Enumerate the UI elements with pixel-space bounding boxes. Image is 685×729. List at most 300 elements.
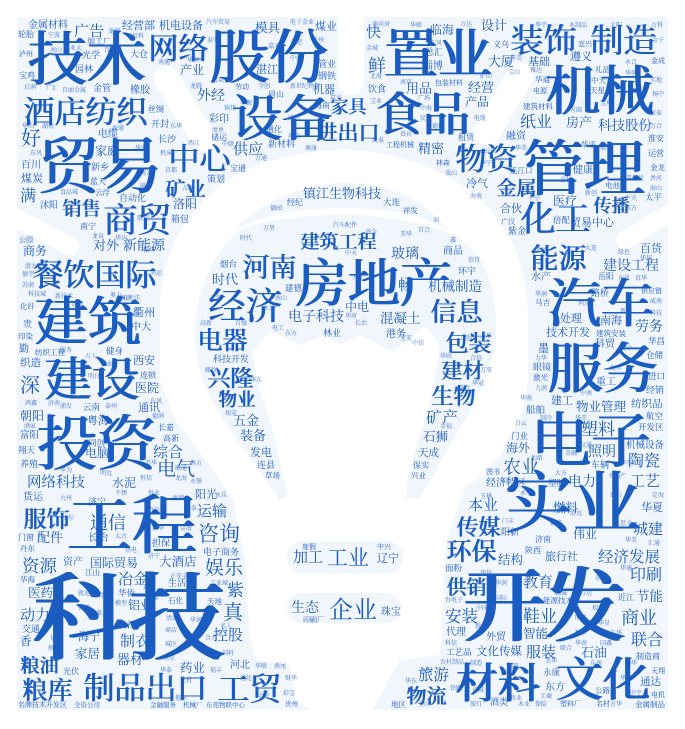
medium keywords: middle left: 西安: [133, 352, 155, 368]
medium keywords: upper left: [18, 16, 337, 245]
medium keywords: lower left: 海宁: [78, 628, 100, 644]
medium keywords: lower right: 塑料厂: [560, 699, 581, 709]
small filler words: 燕尾: [274, 661, 286, 670]
medium keywords: lower right: 华夏: [641, 499, 663, 515]
small filler words: 南京: [400, 77, 412, 86]
secondary keywords: 经济: [208, 276, 282, 330]
largest keywords: 开发: [464, 543, 626, 659]
small filler words: 明珠: [575, 613, 587, 622]
center capsule labels: 加工: [293, 546, 323, 567]
small filler words: 西江: [188, 138, 200, 147]
medium keywords: middle left: 时代: [212, 269, 238, 288]
small filler words: 恒业: [148, 488, 160, 497]
medium keywords: lower left: 机械厂: [183, 700, 203, 709]
medium keywords: middle right: 纺织品: [631, 396, 662, 411]
secondary keywords: 服饰: [23, 501, 69, 534]
medium keywords: upper right: 大厦: [488, 51, 514, 70]
small filler words: 电工: [272, 323, 284, 332]
small filler words: 东风: [30, 148, 42, 157]
small filler words: 泰安: [207, 35, 219, 44]
small filler words: 湖南: [42, 121, 54, 130]
small filler words: 长城: [472, 685, 484, 694]
medium keywords: middle left: 健身: [106, 345, 124, 357]
small filler words: 亚太: [70, 43, 82, 52]
medium keywords: upper right: 房产: [566, 112, 592, 131]
small filler words: 服务: [60, 345, 72, 354]
medium keywords: lower left: 货运: [23, 488, 44, 503]
small filler words: 美华: [145, 458, 157, 467]
small filler words: 城区: [165, 639, 177, 648]
medium keywords: middle left: 建德: [285, 282, 303, 294]
medium keywords: middle right: 港务: [386, 325, 406, 340]
secondary keywords: 家具: [330, 93, 367, 119]
small filler words: 高新: [200, 318, 212, 327]
secondary keywords: 兴隆: [207, 360, 253, 393]
medium keywords: middle right: 环宇: [458, 264, 476, 277]
small filler words: 福丰: [210, 665, 222, 674]
small filler words: 百强: [235, 318, 248, 327]
small filler words: 龙湖: [530, 453, 542, 462]
small filler words: 玉山: [418, 699, 430, 708]
medium keywords: upper left: 百川: [21, 156, 41, 171]
small filler words: 国华: [146, 594, 158, 603]
small filler words: 门丰: [502, 516, 514, 525]
medium keywords: upper left: 新材料: [268, 137, 295, 150]
medium keywords: lower left: 咨询: [198, 518, 240, 548]
small filler words: 沃尔: [288, 113, 300, 122]
small filler words: 通达: [240, 673, 252, 682]
small filler words: 中国: [476, 603, 488, 612]
medium keywords: lower left: 药业: [180, 658, 206, 676]
small filler words: 玉林: [480, 491, 492, 500]
small filler words: 航空: [137, 213, 149, 222]
small filler words: 华为: [60, 465, 72, 474]
small filler words: 新泰: [650, 108, 662, 117]
medium keywords: upper right: 电池: [605, 180, 620, 191]
small filler words: 鸿鑫: [25, 398, 37, 407]
medium keywords: upper right: 大连: [383, 196, 401, 208]
small filler words: 华开: [575, 413, 587, 422]
small filler words: 浦发: [60, 401, 72, 410]
small filler words: 长治: [355, 318, 368, 327]
medium keywords: lower left: 紫: [227, 576, 244, 601]
medium keywords: lower left: 国际贸易: [90, 554, 138, 571]
small filler words: 新技术: [55, 291, 73, 300]
small filler words: 南山: [50, 45, 62, 54]
large keywords: 实业: [505, 450, 641, 547]
medium keywords: middle right: 建设工程: [603, 255, 659, 275]
small filler words: 美华: [545, 656, 557, 665]
medium keywords: upper right: [287, 15, 665, 237]
medium keywords: lower right: 伟业: [573, 525, 597, 542]
medium keywords: upper right: 义乌: [493, 39, 509, 50]
medium keywords: upper left: 供应: [233, 138, 263, 159]
small filler words: 华府: [345, 311, 357, 320]
small filler words: 制冷: [540, 413, 552, 422]
medium keywords: upper right: 电源: [533, 86, 548, 96]
medium keywords: lower left: 大酒店: [159, 552, 197, 570]
small filler words: 百川: [148, 505, 160, 514]
medium keywords: middle right: 门业: [511, 430, 529, 442]
small filler words: 太古: [115, 531, 127, 540]
small filler words: 科信: [445, 638, 457, 647]
medium keywords: lower left: 医药: [28, 583, 53, 601]
medium keywords: lower left: 阳光: [195, 486, 217, 502]
small filler words: 海山: [650, 183, 662, 192]
medium keywords: upper left: 宝通: [230, 163, 246, 174]
medium keywords: upper left: 经营部: [122, 17, 155, 33]
medium keywords: middle right: 塑胶: [548, 477, 566, 489]
small filler words: 锦邦: [224, 103, 236, 112]
secondary keywords: 传媒: [456, 511, 500, 542]
medium keywords: lower right: 近江: [618, 592, 634, 603]
small filler words: 广汇: [46, 83, 58, 92]
small filler words: 汽车配件: [333, 220, 357, 229]
medium keywords: middle right: 华昌: [648, 335, 665, 347]
small filler words: 万达: [460, 19, 472, 28]
small filler words: 下关: [625, 193, 637, 202]
small filler words: 东方: [625, 203, 637, 212]
small filler words: 品牌: [183, 183, 195, 192]
small filler words: 九润: [535, 383, 547, 392]
small filler words: 华润: [625, 68, 637, 77]
medium keywords: lower left: 运输: [197, 500, 227, 521]
small filler words: 云山: [480, 146, 492, 155]
large keywords: 文化: [556, 643, 650, 710]
medium keywords: lower right: 陕西: [525, 545, 541, 556]
small filler words: 龙湖: [108, 26, 120, 35]
large keywords: 管理: [523, 121, 645, 208]
small filler words: 中宇: [630, 688, 642, 697]
medium keywords: middle left: 医院: [135, 379, 159, 396]
medium keywords: middle left: 化纤: [20, 301, 35, 312]
medium keywords: upper right: 融资: [506, 127, 527, 142]
small filler words: 华泰: [620, 673, 632, 682]
large keywords: 置业: [384, 12, 492, 89]
small filler words: 制造: [470, 658, 482, 667]
small filler words: 北海: [370, 71, 382, 80]
medium keywords: upper left: 云浮: [95, 187, 110, 198]
center capsule labels: 珠宝: [381, 603, 401, 618]
small filler words: 绿色: [618, 247, 630, 256]
medium keywords: middle left: 翔天: [18, 444, 36, 456]
large keywords: 材料: [456, 651, 540, 711]
small filler words: 白云: [515, 418, 527, 427]
secondary keywords: 化工: [520, 192, 590, 242]
medium keywords: lower left: 器材: [117, 649, 143, 668]
small filler words: 苏润: [22, 280, 34, 289]
medium keywords: middle left: 衢州: [133, 304, 155, 320]
small filler words: 华泰: [185, 503, 197, 512]
small filler words: 华信: [480, 568, 492, 577]
medium keywords: upper left: 自动化: [119, 191, 146, 204]
small filler words: 扬中: [652, 89, 664, 98]
small filler words: 华泰: [160, 665, 172, 674]
medium keywords: middle right: 照明: [588, 441, 616, 461]
small filler words: 时代: [240, 233, 252, 242]
small filler words: 财华: [285, 673, 297, 682]
medium keywords: lower right: 公路: [595, 685, 610, 696]
small filler words: 大方: [555, 468, 567, 477]
small filler words: 合力: [205, 633, 217, 642]
small filler words: 大连: [585, 243, 597, 252]
medium keywords: upper left: 箱包: [171, 212, 189, 225]
small filler words: 金子: [652, 35, 664, 44]
small filler words: 沃尔: [62, 513, 74, 522]
small filler words: 华宇: [535, 20, 547, 29]
small filler words: 万里: [263, 223, 275, 232]
small filler words: 方华: [610, 699, 622, 708]
secondary keywords: 销售: [62, 194, 100, 221]
medium keywords: lower right: 商业: [621, 604, 657, 630]
small filler words: 新华: [152, 523, 164, 532]
medium keywords: lower right: 印刷: [630, 562, 662, 585]
small filler words: 华南: [575, 638, 587, 647]
medium keywords: lower right: 服装: [526, 641, 556, 662]
small filler words: 金福: [440, 421, 452, 430]
medium keywords: lower right: 电机: [651, 690, 665, 700]
small filler words: 瑞安: [592, 603, 604, 612]
small filler words: 数字: [575, 628, 587, 637]
medium keywords: upper left: 长沙: [158, 132, 177, 145]
medium keywords: middle left: 电脑: [85, 444, 109, 461]
medium keywords: lower left: 担保: [152, 536, 170, 549]
medium keywords: upper right: 工程机械: [386, 140, 414, 150]
small filler words: 热电: [125, 545, 137, 554]
medium keywords: middle left: 高新: [163, 433, 179, 444]
medium keywords: upper left: 模具: [255, 18, 281, 36]
secondary keywords: 生物: [431, 380, 475, 411]
medium keywords: upper right: 贸易中心: [570, 214, 615, 230]
small filler words: 海尔: [610, 363, 622, 372]
center capsule labels: 度假: [302, 542, 316, 552]
small filler words: 南通: [158, 57, 170, 66]
medium keywords: lower left: 光伏: [63, 666, 79, 677]
small filler words: 德润: [152, 411, 164, 420]
small filler words: 中信: [412, 338, 424, 347]
small filler words: 香河: [650, 173, 662, 182]
medium keywords: lower right: 城建: [633, 518, 663, 539]
small filler words: 新华: [475, 621, 487, 630]
medium keywords: upper right: 金龙: [650, 162, 665, 173]
small filler words: 清泉: [212, 75, 224, 84]
small filler words: 华东: [250, 375, 262, 384]
small filler words: 旅行: [470, 699, 482, 708]
small filler words: 电缆: [474, 113, 486, 122]
large keywords: 贸易: [38, 117, 162, 206]
large keywords: 投资: [37, 397, 159, 483]
medium keywords: lower left: 东莞物联中心: [206, 700, 246, 709]
medium keywords: lower right: 旅行社: [545, 548, 578, 564]
medium keywords: lower right: [391, 494, 665, 710]
small filler words: 太平洋: [122, 293, 140, 302]
small filler words: 商店: [165, 625, 177, 634]
small filler words: 百联: [120, 293, 132, 302]
medium keywords: upper right: 连江口: [510, 165, 532, 176]
medium keywords: lower right: 鞋业: [523, 602, 557, 627]
small filler words: 鑫: [450, 235, 456, 244]
medium keywords: middle right: 塑料: [581, 415, 615, 440]
medium keywords: upper right: 经纪: [287, 197, 303, 208]
small filler words: 龙泉: [92, 231, 104, 240]
small filler words: 万事: [480, 365, 492, 374]
medium keywords: lower right: 联合: [631, 627, 663, 650]
small filler words: 华山: [22, 121, 34, 130]
large keywords: 电子: [531, 394, 651, 480]
medium keywords: middle left: 烟台: [220, 258, 238, 270]
medium keywords: upper right: 基础: [528, 53, 550, 69]
small filler words: 永强: [190, 476, 203, 485]
medium keywords: middle left: 印染: [18, 331, 33, 342]
small filler words: 方圆: [570, 105, 582, 114]
medium keywords: upper right: 产品: [465, 93, 489, 110]
small filler words: 华南: [520, 393, 532, 402]
medium keywords: lower left: 门窗: [18, 532, 34, 543]
medium keywords: middle right: 马吉: [535, 297, 550, 308]
small filler words: 合创: [460, 333, 472, 342]
medium keywords: upper right: 合伙: [500, 200, 522, 216]
medium keywords: upper left: 沭阳: [40, 198, 58, 211]
medium keywords: middle right: 航空: [646, 410, 664, 422]
medium keywords: upper right: 包装材料: [435, 78, 463, 88]
medium keywords: middle right: 劳务: [635, 316, 663, 336]
small filler words: 九州: [60, 493, 72, 502]
medium keywords: lower left: 资产: [63, 553, 83, 568]
small filler words: 美华: [400, 229, 412, 238]
small filler words: 济宁: [148, 551, 160, 560]
small filler words: 拖车: [175, 693, 187, 702]
small filler words: 华通: [620, 563, 632, 572]
small filler words: 国华: [625, 658, 637, 667]
small filler words: 不小: [528, 193, 541, 202]
medium keywords: middle right: 车辆: [591, 458, 609, 471]
medium keywords: middle right: 陶瓷: [628, 448, 660, 471]
small filler words: 中海: [290, 53, 302, 62]
small filler words: 万合: [650, 121, 662, 130]
medium keywords: upper left: 产业: [180, 61, 204, 78]
medium keywords: lower left: 香: [20, 633, 32, 649]
medium keywords: lower right: 安装: [445, 603, 478, 627]
medium keywords: middle right: 矿产: [426, 405, 458, 428]
medium keywords: upper right: 运营: [648, 148, 664, 159]
medium keywords: middle left: 云南: [83, 401, 101, 413]
medium keywords: lower right: 教育: [523, 571, 553, 592]
small filler words: 绿气: [72, 299, 84, 308]
small filler words: 度单: [212, 125, 224, 134]
small filler words: 碧荣: [78, 603, 90, 612]
small filler words: 不锈: [115, 488, 127, 497]
medium keywords: upper left: 光学: [82, 48, 100, 61]
small filler words: 华润: [190, 615, 202, 624]
secondary keywords: 建筑工程: [300, 227, 376, 254]
medium keywords: lower right: 阳新: [501, 525, 519, 538]
small filler words: 合信: [470, 353, 482, 362]
medium keywords: middle right: 仓储: [646, 349, 664, 361]
medium keywords: lower right: 节能: [636, 585, 663, 605]
small filler words: 科技: [650, 308, 662, 317]
medium keywords: middle right: 开发区: [638, 421, 664, 433]
small filler words: 易科: [132, 31, 144, 40]
medium keywords: lower left: 交通: [22, 622, 40, 635]
small filler words: 汽车贸易: [206, 17, 230, 26]
medium keywords: lower right: 酒类: [490, 695, 508, 708]
small filler words: 联合: [140, 181, 152, 190]
medium keywords: middle right: 保实: [413, 460, 429, 471]
medium keywords: upper right: 租赁: [458, 132, 475, 143]
small filler words: 启润: [24, 82, 36, 91]
medium keywords: upper left: 海南: [314, 100, 330, 111]
small filler words: 瑞丰: [600, 143, 612, 152]
medium keywords: upper left: 劳动: [235, 82, 249, 92]
medium keywords: upper right: 紫金: [508, 224, 526, 237]
small filler words: 东方: [285, 328, 297, 337]
small filler words: 德园: [270, 203, 282, 212]
medium keywords: upper left: 好: [21, 122, 41, 151]
largest keywords: 科技: [33, 543, 225, 680]
medium keywords: upper left: 通化: [266, 124, 282, 135]
medium keywords: lower left: 控股: [213, 624, 243, 645]
medium keywords: lower right: 本业: [468, 494, 498, 515]
small filler words: 华美: [510, 53, 522, 62]
medium keywords: upper right: 精密: [418, 138, 444, 157]
medium keywords: middle left: 五金: [233, 410, 259, 429]
small filler words: 宝利: [600, 98, 612, 107]
small filler words: 东方: [500, 475, 512, 484]
medium keywords: upper left: 园林: [75, 62, 93, 75]
small filler words: 天虹: [102, 359, 114, 368]
center capsule labels: 印刷厂: [303, 615, 324, 625]
medium keywords: lower left: 家居: [75, 644, 100, 662]
medium keywords: lower right: 旅游: [418, 663, 450, 685]
medium keywords: upper right: 镇江生物科技: [303, 183, 381, 202]
medium keywords: lower left: 铝业: [128, 596, 152, 613]
center capsule labels: 中兴: [377, 542, 392, 552]
medium keywords: middle left: 富阳: [20, 427, 39, 441]
medium keywords: upper left: 机器: [313, 81, 335, 97]
medium keywords: lower left: 配件: [37, 527, 63, 546]
small filler words: 潜力: [25, 261, 37, 270]
medium keywords: upper left: 机电设备: [159, 17, 203, 33]
medium keywords: lower left: 丹东: [20, 543, 35, 554]
medium keywords: lower left: 华侨: [118, 587, 136, 599]
medium keywords: lower left: 长治: [88, 529, 109, 544]
medium keywords: lower left: 娱乐: [205, 553, 244, 580]
small filler words: 联通: [175, 463, 187, 472]
medium keywords: lower right: 智能: [523, 624, 548, 642]
medium keywords: lower left: 贵州: [285, 699, 298, 708]
medium keywords: middle left: 长嘉: [158, 422, 174, 433]
medium keywords: lower right: 经济发展: [598, 545, 660, 567]
small filler words: 木制品: [569, 20, 587, 29]
medium keywords: lower left: 全资公司: [74, 700, 100, 709]
small filler words: 华润: [535, 289, 547, 298]
small filler words: 信贷: [468, 255, 481, 264]
small filler words: 永合: [625, 57, 637, 66]
small filler words: 绿城: [555, 588, 567, 597]
small filler words: 合肥: [290, 37, 302, 46]
small filler words: 工业城: [210, 578, 228, 587]
small filler words: 华美: [625, 535, 637, 544]
medium keywords: upper right: 淮安: [648, 133, 664, 144]
medium keywords: middle left: 连县: [257, 458, 275, 471]
medium keywords: upper left: 电缆: [98, 125, 118, 140]
medium keywords: middle right: 百货: [640, 240, 663, 256]
small filler words: 鸿运: [150, 268, 163, 277]
small filler words: 京华: [635, 273, 647, 282]
small filler words: 华宇: [620, 458, 632, 467]
medium keywords: middle left: 深: [20, 369, 40, 398]
center capsule labels: 辽宁: [377, 550, 399, 566]
